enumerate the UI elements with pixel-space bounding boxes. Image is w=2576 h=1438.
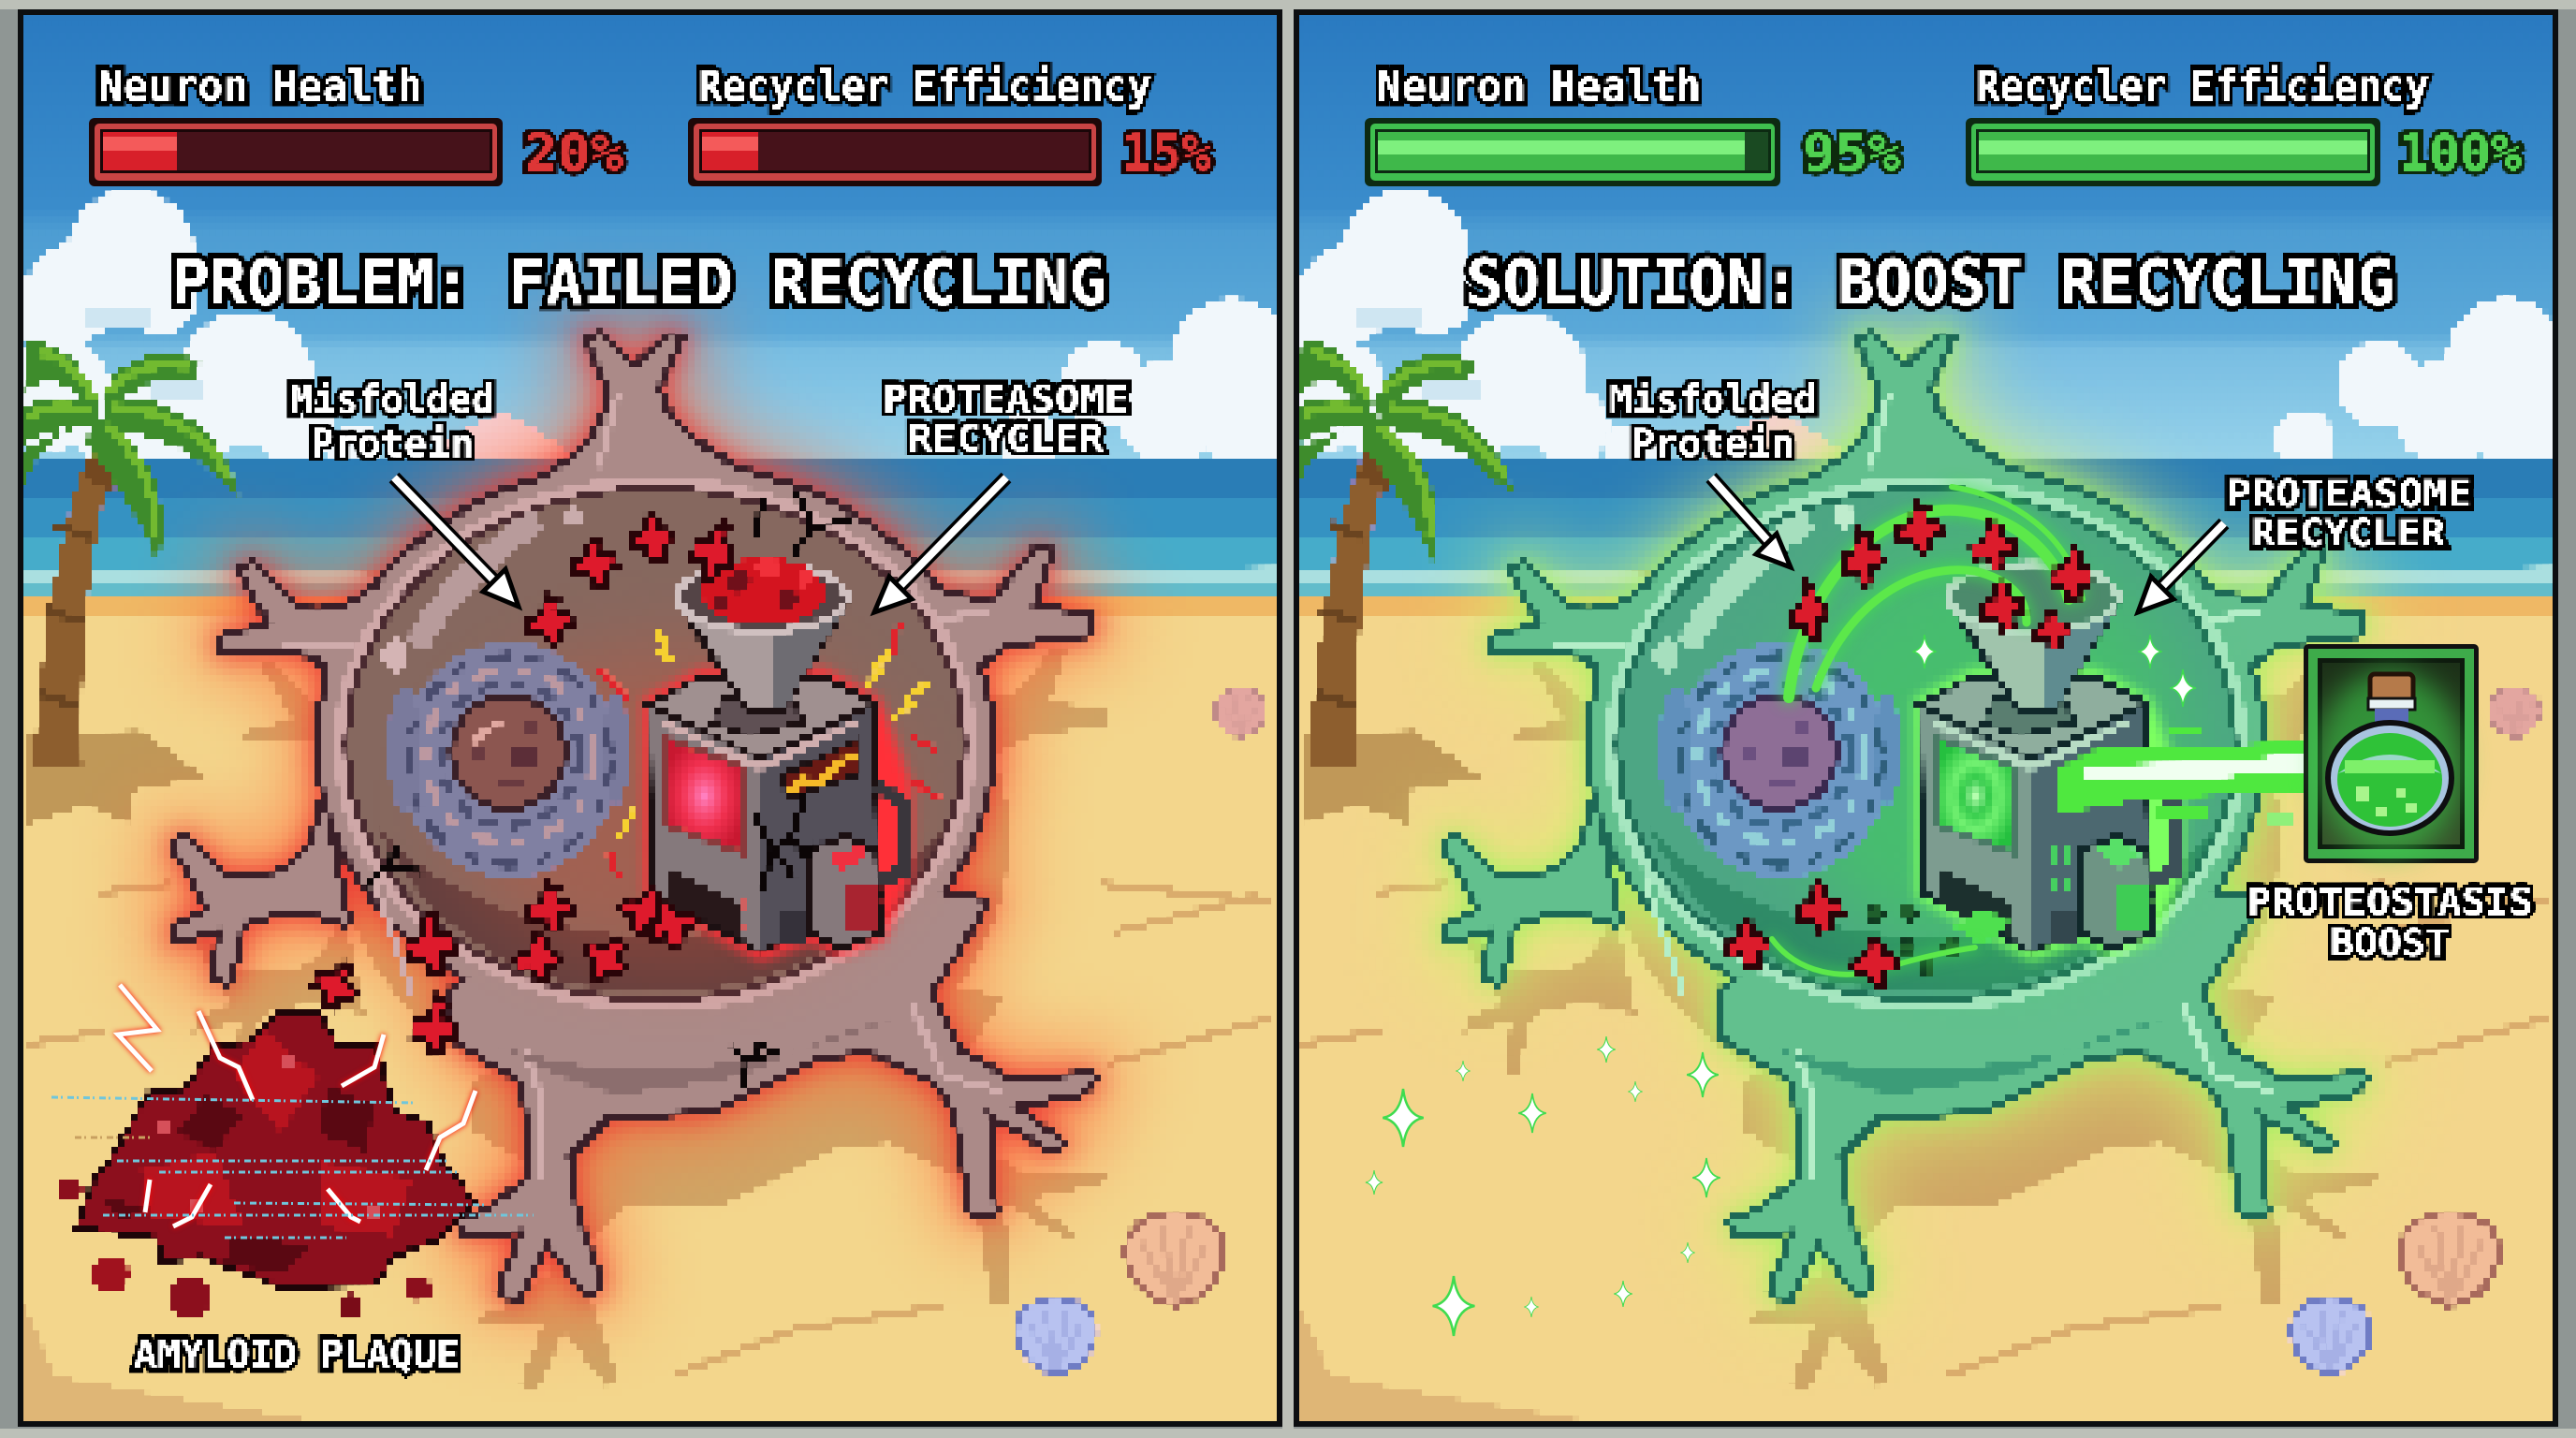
label: proteasome recycler: RECYCLER xyxy=(908,418,1105,461)
boost beam xyxy=(2056,726,2305,824)
stat: recycler efficiency xyxy=(688,61,1211,186)
label: misfolded protein: Protein xyxy=(1632,420,1794,466)
potion card: proteostasis boost xyxy=(2304,644,2479,863)
stat: neuron health: Neuron Health xyxy=(1377,61,1701,111)
label: proteasome recycler: PROTEASOME xyxy=(2227,473,2472,516)
label: proteasome recycler xyxy=(883,378,1129,461)
label: proteasome recycler: RECYCLER xyxy=(2251,512,2446,555)
stat: recycler efficiency: Recycler Efficiency xyxy=(1976,61,2429,111)
label: proteasome recycler: PROTEASOME xyxy=(883,378,1129,421)
stat: neuron health xyxy=(1365,61,1901,186)
label: misfolded protein: Protein xyxy=(311,420,474,466)
label: misfolded protein xyxy=(1609,376,1817,466)
stat: recycler efficiency: 15% xyxy=(1121,124,1211,183)
stat: recycler efficiency xyxy=(1966,61,2522,186)
stat: neuron health: 20% xyxy=(524,124,624,183)
arrow: misfolded protein xyxy=(1711,477,1791,567)
amyloid lightning xyxy=(118,985,476,1226)
stat: recycler efficiency: 100% xyxy=(2398,124,2522,183)
label: amyloid plaque: AMYLOID PLAQUE xyxy=(134,1331,460,1377)
panel: solution xyxy=(1275,0,2576,1438)
sparkles xyxy=(1366,635,2196,1336)
misfolded protein fragments xyxy=(1725,504,2097,987)
title: solution: SOLUTION: BOOST RECYCLING xyxy=(1466,246,2394,320)
label: proteasome recycler xyxy=(2227,473,2472,555)
label: misfolded protein xyxy=(290,376,494,466)
stat: neuron health: Neuron Health xyxy=(98,61,422,111)
label: proteostasis boost: PROTEOSTASIS xyxy=(2247,881,2533,924)
label: misfolded protein: Misfolded xyxy=(290,376,494,422)
panel: problem xyxy=(0,0,1344,1438)
illustration: healthy neuron on beach xyxy=(1275,0,2576,1438)
stat: neuron health: 95% xyxy=(1803,124,1901,183)
title: problem: PROBLEM: FAILED RECYCLING xyxy=(172,246,1106,320)
stat: recycler efficiency: Recycler Efficiency xyxy=(698,61,1151,111)
arrow: misfolded protein xyxy=(394,477,519,607)
label: proteostasis boost: BOOST xyxy=(2330,922,2450,965)
label: proteostasis boost xyxy=(2247,881,2533,965)
green swirl paths xyxy=(1772,487,2083,975)
arrow: proteasome recycler xyxy=(2138,523,2224,612)
arrow: proteasome recycler xyxy=(874,477,1006,612)
label: misfolded protein: Misfolded xyxy=(1609,376,1817,422)
glitch lines xyxy=(51,1097,534,1238)
stat: neuron health xyxy=(89,61,624,186)
illustration: failing neuron on beach xyxy=(0,0,1344,1438)
